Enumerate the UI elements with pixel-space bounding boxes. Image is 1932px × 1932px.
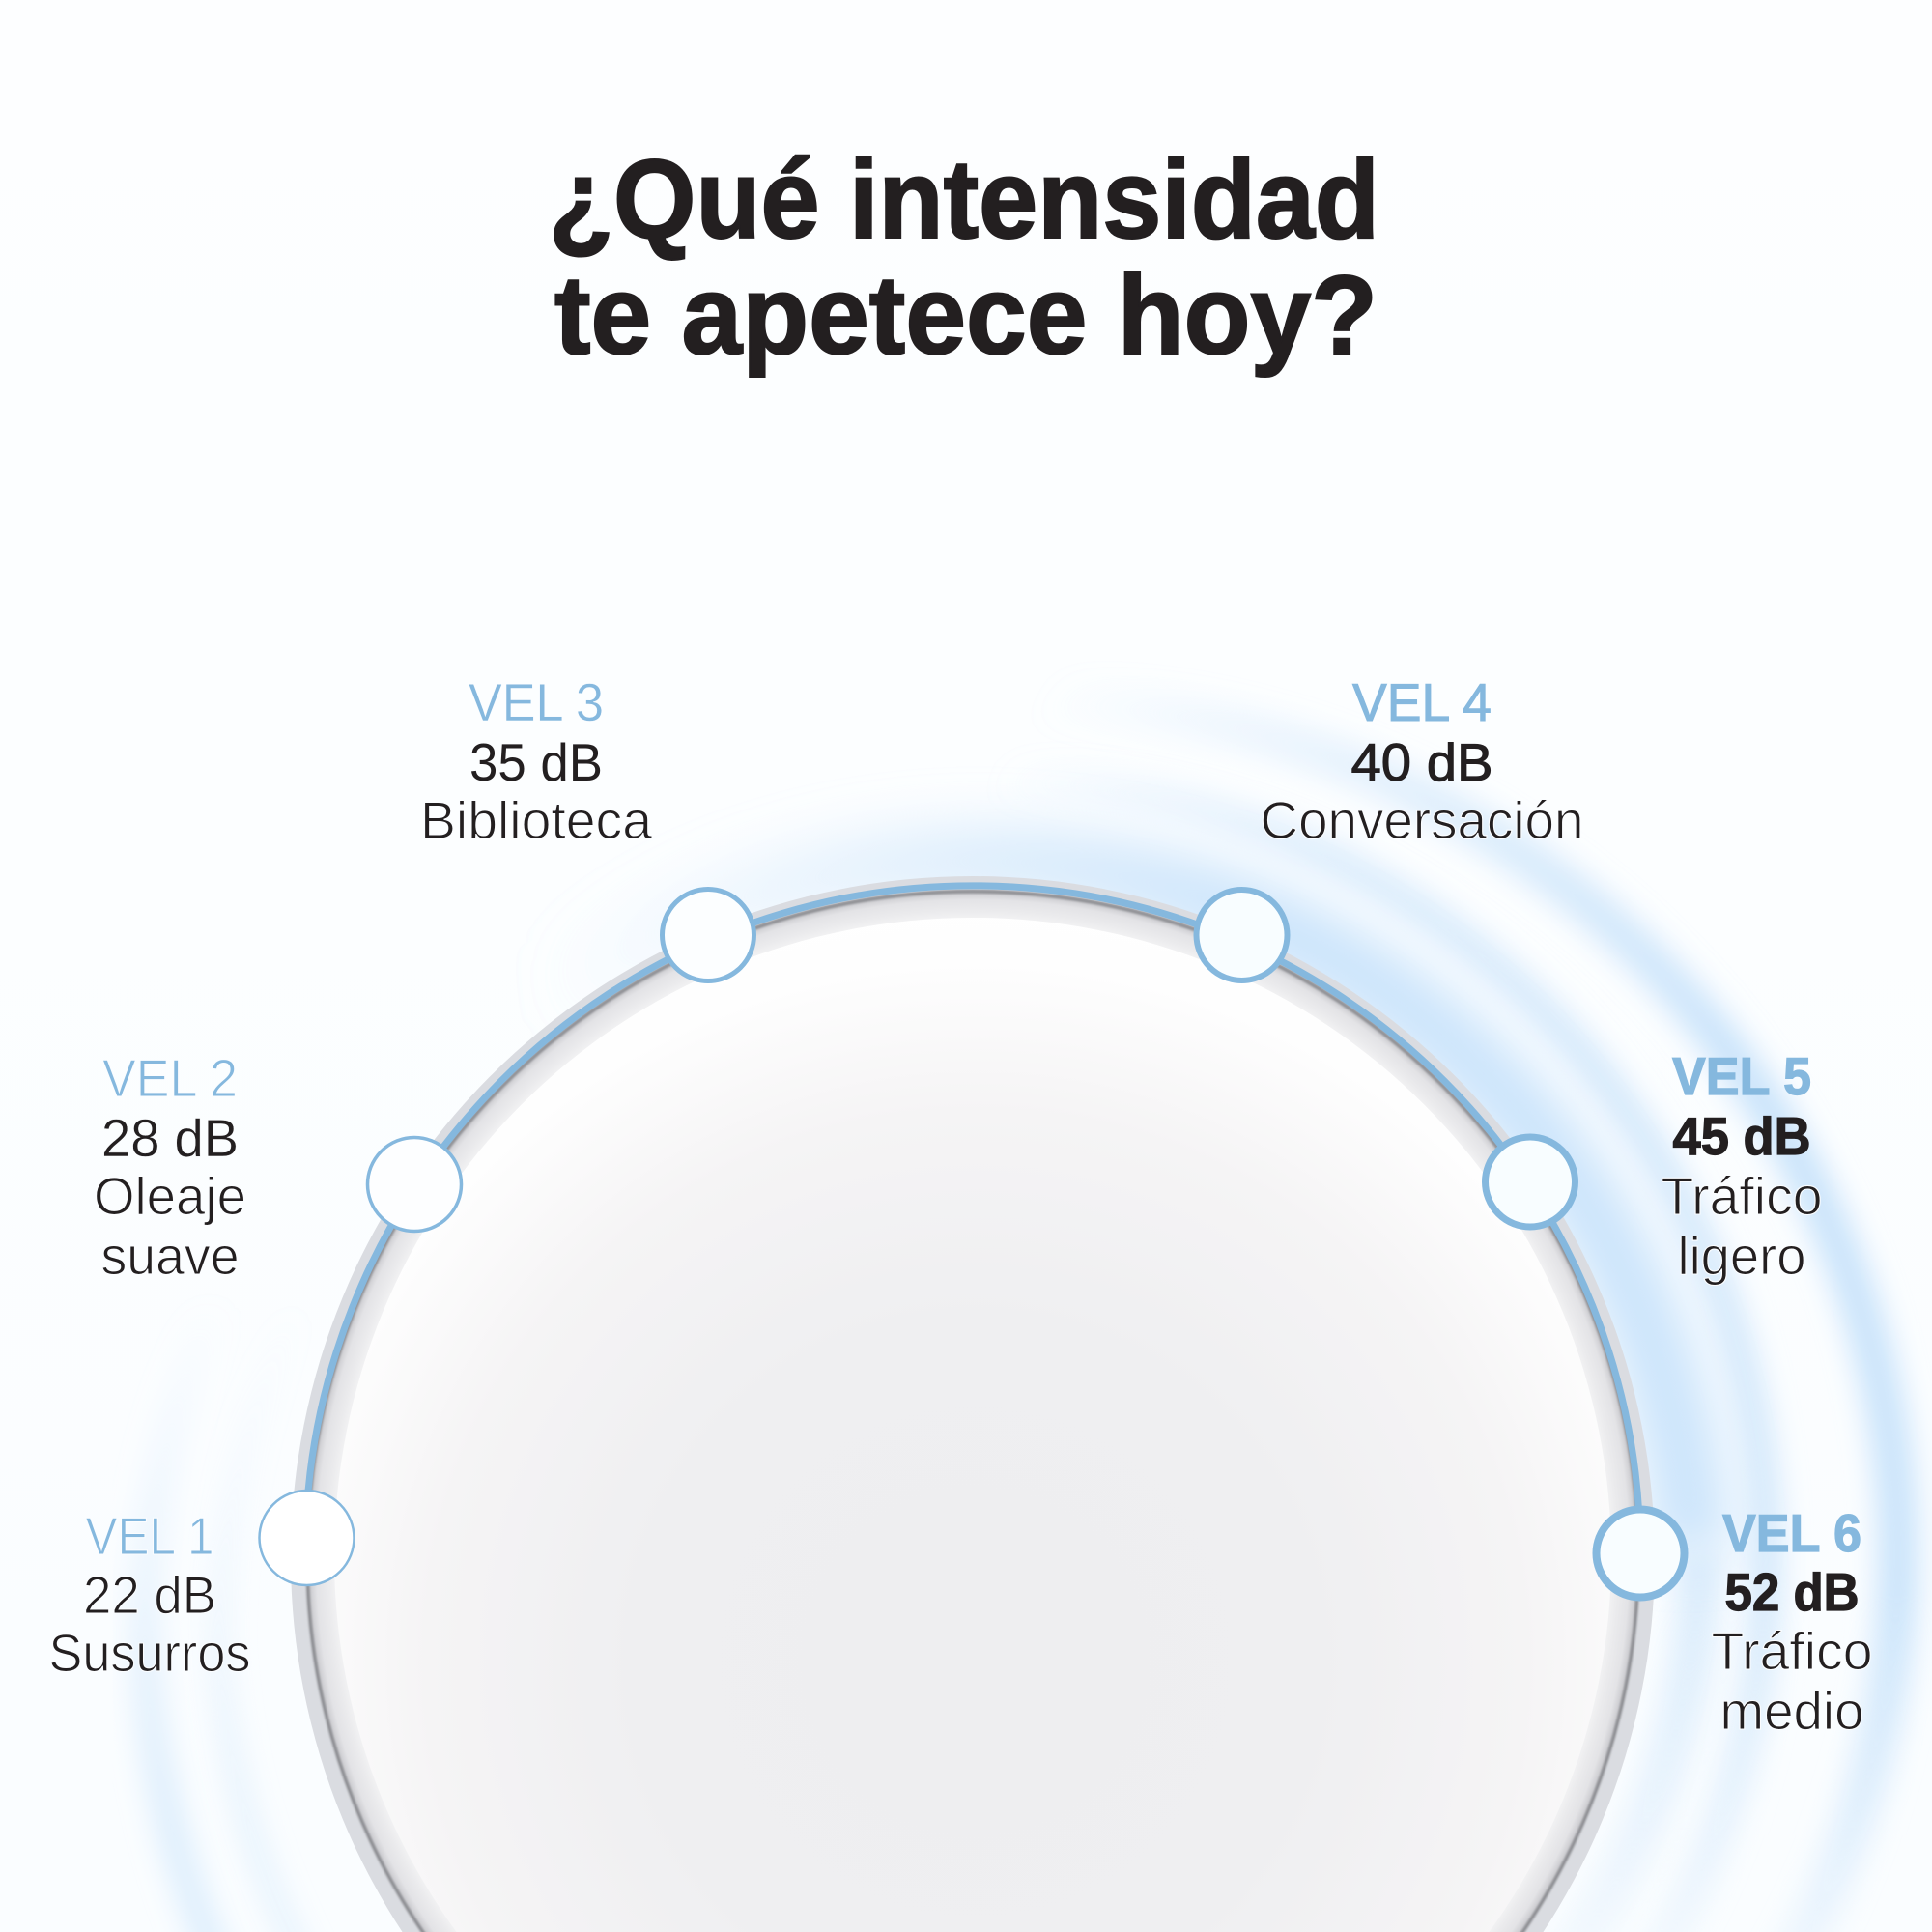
inner ring bevel <box>306 890 1639 1932</box>
label: VEL 2 <box>94 1048 246 1286</box>
node 1 <box>259 1491 354 1585</box>
label: VEL 6: Tráfico <box>1712 1621 1872 1681</box>
blue progress arc <box>305 886 1640 1553</box>
title: ¿Qué intensidad <box>549 136 1379 262</box>
node 5 <box>1486 1137 1575 1227</box>
label: VEL 1: VEL 1 <box>85 1506 214 1566</box>
label: VEL 3: Biblioteca <box>420 790 652 850</box>
label: VEL 6: 52 dB <box>1725 1562 1859 1622</box>
label: VEL 3: 35 dB <box>469 732 603 792</box>
node 2 <box>367 1138 462 1231</box>
device circle <box>291 876 1655 1932</box>
label: VEL 2: suave <box>100 1226 240 1286</box>
label: VEL 6: VEL 6 <box>1722 1503 1861 1563</box>
label: VEL 5: ligero <box>1677 1226 1806 1286</box>
title: te apetece hoy? <box>554 252 1378 378</box>
label: VEL 3 <box>420 672 652 850</box>
label: VEL 5: VEL 5 <box>1672 1046 1811 1106</box>
title <box>549 136 1379 378</box>
inner disc <box>334 918 1611 1932</box>
dark seam line <box>307 892 1638 1932</box>
label: VEL 1: 22 dB <box>83 1565 216 1625</box>
node 4 <box>1196 890 1287 980</box>
label: VEL 2: VEL 2 <box>102 1048 238 1108</box>
label: VEL 3: VEL 3 <box>469 672 604 732</box>
sound waves: blue blurred arcs around the device <box>145 700 1898 1932</box>
label: VEL 1 <box>48 1506 251 1683</box>
outer ring <box>291 876 1655 1932</box>
label: VEL 4: VEL 4 <box>1352 672 1492 732</box>
label: VEL 5 <box>1662 1046 1822 1286</box>
label: VEL 5: Tráfico <box>1662 1166 1822 1226</box>
label: VEL 2: Oleaje <box>94 1166 246 1226</box>
node 3 <box>663 889 753 981</box>
label: VEL 2: 28 dB <box>101 1108 239 1168</box>
label: VEL 6: medio <box>1719 1681 1864 1741</box>
label: VEL 6 <box>1712 1503 1872 1741</box>
label: VEL 4 <box>1260 672 1584 850</box>
label: VEL 5: 45 dB <box>1673 1106 1810 1166</box>
label: VEL 4: 40 dB <box>1350 732 1493 792</box>
node 6 <box>1596 1509 1685 1598</box>
label: VEL 4: Conversación <box>1260 790 1584 850</box>
label: VEL 1: Susurros <box>48 1623 251 1683</box>
